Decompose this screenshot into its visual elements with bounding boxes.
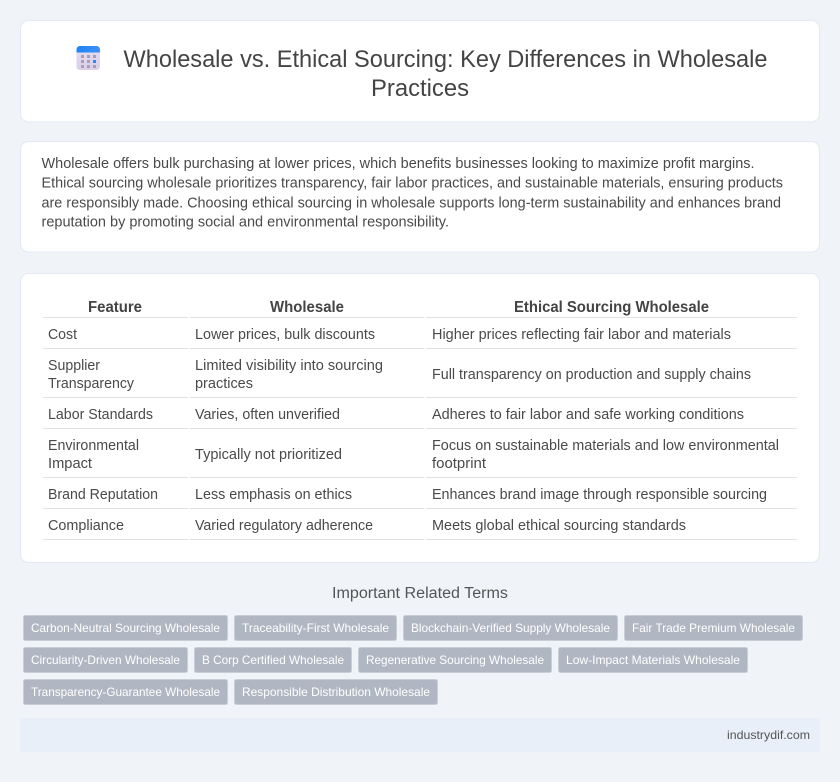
heading: important related terms: Important Related Terms	[332, 585, 508, 602]
table row: compliance: Varied regulatory adherence	[195, 518, 373, 534]
tag: circularity-driven	[24, 648, 188, 672]
tag: circularity-driven: Circularity-Driven Wholesale	[31, 653, 180, 667]
title	[124, 46, 768, 102]
footer: industrydif.com	[727, 728, 810, 742]
table header row: Ethical Sourcing Wholesale	[514, 299, 709, 316]
table row: environmental impact: Impact	[48, 456, 92, 472]
tag: carbon-neutral sourcing	[24, 616, 228, 640]
table row: environmental impact: Typically not prioritized	[195, 447, 342, 463]
tag: low-impact materials	[558, 648, 748, 672]
table row: brand reputation: Brand Reputation	[48, 487, 158, 503]
panel: header	[20, 20, 820, 122]
tag: transparency-guarantee	[24, 680, 228, 704]
table row: environmental impact: footprint	[432, 456, 486, 472]
table row: labor standards: Varies, often unverified	[195, 407, 340, 423]
table header row	[43, 299, 797, 318]
tag: traceability-first: Traceability-First Wholesale	[242, 621, 389, 635]
table row: supplier transparency: Limited visibility into sourcing	[195, 358, 383, 374]
table row: environmental impact: Focus on sustainable materials and low environmental	[432, 438, 779, 454]
tag: fair trade premium: Fair Trade Premium Wholesale	[632, 621, 795, 635]
table row: cost: Cost	[48, 327, 77, 343]
table row: labor standards: Labor Standards	[48, 407, 153, 423]
footer	[20, 718, 820, 752]
table row: environmental impact	[43, 438, 797, 478]
tag: b corp certified: B Corp Certified Wholesale	[202, 653, 344, 667]
tag: transparency-guarantee: Transparency-Guarantee Wholesale	[31, 685, 220, 699]
icon: calendar	[76, 46, 100, 70]
table row: labor standards	[43, 407, 797, 429]
table row: labor standards: Adheres to fair labor and safe working conditions	[432, 407, 744, 423]
text block: description: reputation by promoting social and environmental responsibility.	[42, 214, 449, 230]
table row: supplier transparency: Transparency	[48, 376, 135, 392]
table row: supplier transparency	[43, 358, 797, 398]
table row: supplier transparency: practices	[195, 376, 253, 392]
tag: b corp certified	[194, 648, 352, 672]
table row: cost: Higher prices reflecting fair labor and materials	[432, 327, 731, 343]
tag: blockchain-verified supply	[404, 616, 618, 640]
table row: supplier transparency: Full transparency on production and supply chains	[432, 367, 751, 383]
tag: traceability-first	[234, 616, 396, 640]
text block: description: Ethical sourcing wholesale prioritizes transparency, fair labor practices, and sustainable materials, ensuring products	[42, 176, 783, 192]
table row: compliance: Compliance	[48, 518, 124, 534]
table row: compliance	[43, 518, 797, 540]
tag: low-impact materials: Low-Impact Materials Wholesale	[566, 653, 740, 667]
table row: brand reputation: Less emphasis on ethics	[195, 487, 352, 503]
tag: regenerative sourcing: Regenerative Sourcing Wholesale	[366, 653, 544, 667]
tag list: related terms	[24, 616, 802, 704]
tag: blockchain-verified supply: Blockchain-Verified Supply Wholesale	[411, 621, 610, 635]
tag: responsible distribution	[234, 680, 438, 704]
table row: brand reputation: Enhances brand image through responsible sourcing	[432, 487, 767, 503]
table row: brand reputation	[43, 487, 797, 509]
text block: description: are responsibly made. Choosing ethical sourcing in wholesale supports long-term sustainability and enhances brand	[42, 196, 781, 212]
table header row: Feature	[88, 299, 142, 316]
text block: description: Wholesale offers bulk purchasing at lower prices, which benefits businesses looking to maximize profit margins.	[42, 156, 754, 172]
title: Practices	[371, 75, 469, 102]
panel: description	[20, 142, 820, 252]
table row: environmental impact: Environmental	[48, 438, 139, 454]
table row: cost: Lower prices, bulk discounts	[195, 327, 375, 343]
table row: cost	[43, 327, 797, 349]
table row: compliance: Meets global ethical sourcing standards	[432, 518, 686, 534]
tag: carbon-neutral sourcing: Carbon-Neutral Sourcing Wholesale	[31, 621, 220, 635]
text block: description	[42, 156, 783, 230]
tag: fair trade premium	[624, 616, 802, 640]
panel: comparison table	[20, 274, 820, 562]
table row: supplier transparency: Supplier	[48, 358, 100, 374]
table header row: Wholesale	[270, 299, 344, 316]
tag: regenerative sourcing	[358, 648, 552, 672]
tag: responsible distribution: Responsible Distribution Wholesale	[242, 685, 430, 699]
title: Wholesale vs. Ethical Sourcing: Key Differences in Wholesale	[124, 46, 768, 73]
